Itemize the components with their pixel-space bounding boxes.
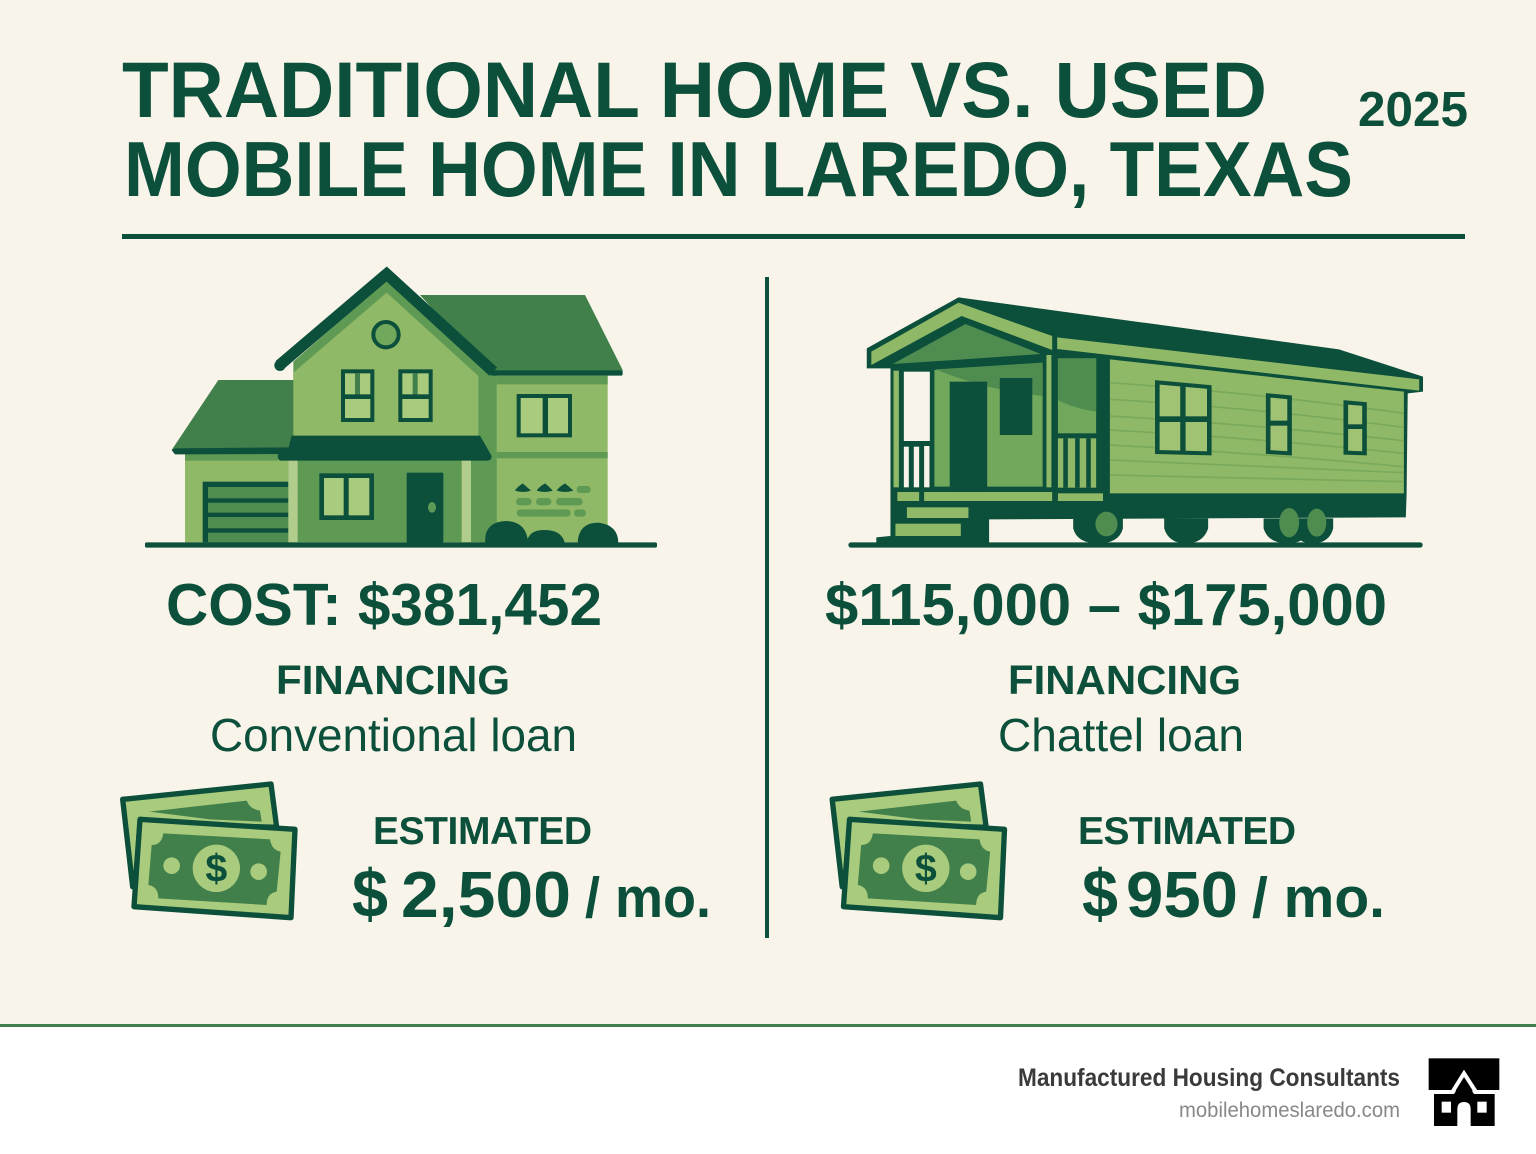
monthly estimate: traditional: / mo.	[585, 866, 711, 930]
title: TRADITIONAL HOME VS. USED	[122, 45, 1267, 134]
footer	[0, 1024, 1536, 1154]
monthly estimate: traditional: 2,500	[401, 858, 571, 931]
monthly estimate: mobile: / mo.	[1252, 866, 1385, 930]
financing heading: mobile: FINANCING	[1008, 657, 1241, 703]
title: MOBILE HOME IN LAREDO, TEXAS	[124, 125, 1353, 213]
icon: mobile home	[848, 297, 1423, 548]
icon: money bills right: $	[915, 846, 937, 890]
monthly estimate: traditional	[352, 856, 711, 932]
financing type: mobile: Chattel loan	[998, 709, 1244, 761]
estimated label: mobile: ESTIMATED	[1078, 810, 1296, 853]
icon: money bills left: $	[205, 846, 227, 890]
icon: money bills left	[123, 784, 295, 918]
financing type: traditional: Conventional loan	[210, 709, 577, 761]
monthly estimate: mobile: 950	[1126, 858, 1238, 931]
financing heading: traditional: FINANCING	[276, 657, 510, 703]
cost: mobile: $115,000 – $175,000	[825, 572, 1387, 638]
cost: traditional: COST: $381,452	[166, 572, 602, 638]
icon: traditional house	[145, 274, 657, 548]
footer company name: Manufactured Housing Consultants	[1018, 1064, 1400, 1092]
footer logo	[1429, 1058, 1499, 1126]
monthly estimate: mobile	[1082, 856, 1385, 932]
icon: money bills right	[832, 784, 1004, 918]
year label: 2025	[1358, 83, 1468, 137]
title	[122, 45, 1353, 213]
monthly estimate: mobile: $	[1082, 856, 1118, 932]
estimated label: traditional: ESTIMATED	[373, 810, 592, 853]
footer url: mobilehomeslaredo.com	[1179, 1099, 1400, 1122]
monthly estimate: traditional: $	[352, 856, 388, 932]
